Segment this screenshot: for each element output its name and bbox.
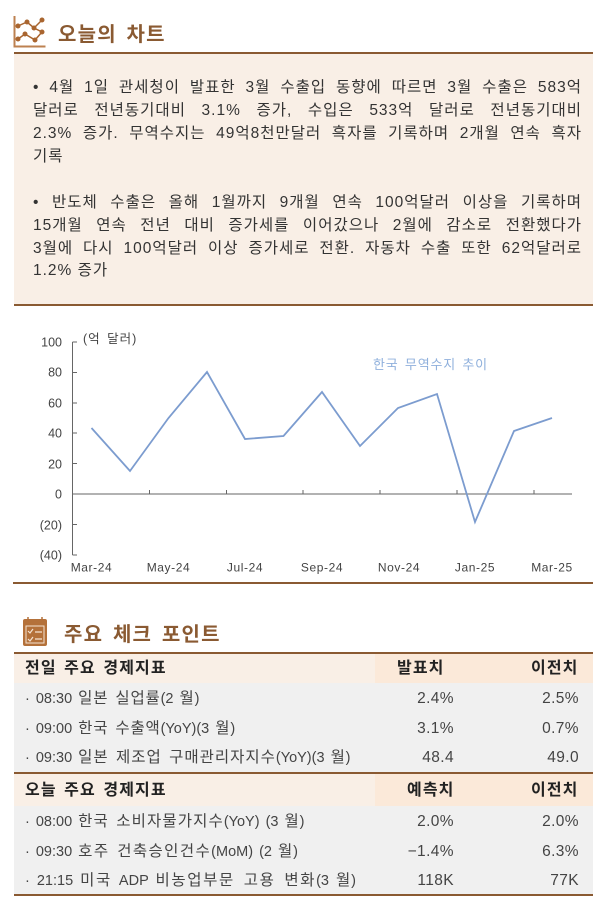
line chart: Korea trade balance: Jul-24 — [227, 560, 263, 574]
icon: chart heading — [14, 16, 46, 48]
table section: today's indicators: 오늘 주요 경제지표 — [25, 782, 167, 799]
line chart: Korea trade balance: (억 달러) — [83, 332, 137, 346]
table section: previous day's indicators: 0.7% — [542, 720, 579, 737]
table section: today's indicators: 2.0% — [542, 813, 579, 830]
line chart: Korea trade balance: 40 — [48, 426, 62, 440]
table section: previous day's indicators: · 09:00 한국 수출액(YoY)(3 월) — [25, 720, 235, 737]
text block: semiconductor summary: 3월에 다시 100억달러 이상 증가세로 전환. 자동차 수출 또한 62억달러로 — [33, 240, 582, 257]
line chart: Korea trade balance: 60 — [48, 396, 62, 410]
table section: previous day's indicators: 3.1% — [417, 720, 454, 737]
panel: summary text — [14, 52, 593, 306]
table section: previous day's indicators: 2.4% — [417, 690, 454, 707]
table section: previous day's indicators: 49.0 — [547, 749, 579, 766]
table section: previous day's indicators: 48.4 — [422, 749, 454, 766]
line chart: Korea trade balance: 20 — [48, 458, 62, 472]
text block: semiconductor summary: 1.2% 증가 — [33, 262, 108, 279]
line chart: Korea trade balance: Nov-24 — [378, 560, 420, 574]
table section: previous day's indicators: 2.5% — [542, 690, 579, 707]
text block: semiconductor summary — [33, 194, 582, 279]
table section: previous day's indicators: · 08:30 일본 실업률(2 월) — [25, 690, 199, 707]
table section: today's indicators: · 21:15 미국 ADP 비농업부문 고용 변화(3 월) — [25, 872, 356, 889]
line chart: Korea trade balance: Sep-24 — [301, 560, 343, 574]
text block: trade summary: 달러로 전년동기대비 3.1% 증가, 수입은 533억 달러로 전년동기대비 — [33, 102, 582, 119]
table section: today's indicators: · 09:30 호주 건축승인건수(MoM) (2 월) — [25, 843, 298, 860]
line chart: Korea trade balance: (20) — [40, 518, 62, 532]
icon: checklist calendar — [23, 617, 47, 646]
table section: previous day's indicators — [14, 652, 593, 772]
heading: key check points: 주요 체크 포인트 — [64, 624, 221, 646]
table section: previous day's indicators: 전일 주요 경제지표 — [25, 660, 167, 677]
text block: trade summary: • 4월 1일 관세청이 발표한 3월 수출입 동향에 따르면 3월 수출은 583억 — [33, 79, 582, 96]
line chart: Korea trade balance: Mar-24 — [71, 560, 112, 574]
table: economic indicators — [14, 652, 593, 896]
line chart: Korea trade balance: 한국 무역수지 추이 — [373, 357, 488, 372]
line chart: Korea trade balance: May-24 — [147, 560, 190, 574]
text block: trade summary: 기록 — [33, 148, 64, 165]
line chart: Korea trade balance: (40) — [40, 548, 62, 562]
text block: trade summary: 2.3% 증가. 무역수지는 49억8천만달러 흑자를 기록하며 2개월 연속 흑자 — [33, 125, 582, 142]
heading: today's chart: 오늘의 차트 — [58, 24, 166, 46]
line chart: Korea trade balance: Jan-25 — [455, 560, 495, 574]
text block: trade summary — [33, 79, 582, 165]
table section: today's indicators: 6.3% — [542, 843, 579, 860]
table section: previous day's indicators: 발표치 — [397, 660, 444, 677]
table section: previous day's indicators: 이전치 — [531, 660, 578, 677]
table section: today's indicators: 118K — [417, 872, 454, 889]
table section: previous day's indicators: · 09:30 일본 제조업 구매관리자지수(YoY)(3 월) — [25, 749, 350, 766]
table section: today's indicators: · 08:00 한국 소비자물가지수(YoY) (3 월) — [25, 813, 304, 830]
line chart: Korea trade balance — [13, 332, 593, 584]
table section: today's indicators — [14, 772, 593, 896]
line chart: Korea trade balance: Mar-25 — [531, 560, 573, 574]
text block: semiconductor summary: • 반도체 수출은 올해 1월까지 9개월 연속 100억달러 이상을 기록하며 — [33, 194, 582, 211]
line chart: Korea trade balance: 0 — [55, 488, 62, 502]
table section: today's indicators: 예측치 — [407, 782, 454, 799]
table section: today's indicators: −1.4% — [408, 843, 454, 860]
line chart: Korea trade balance: 80 — [48, 366, 62, 380]
table section: today's indicators: 이전치 — [531, 782, 578, 799]
table section: today's indicators: 77K — [550, 872, 579, 889]
text block: semiconductor summary: 15개월 연속 전년 대비 증가세를 이어갔으나 2월에 감소로 전환했다가 — [33, 217, 582, 234]
line chart: Korea trade balance: 100 — [41, 336, 62, 350]
table section: today's indicators: 2.0% — [417, 813, 454, 830]
